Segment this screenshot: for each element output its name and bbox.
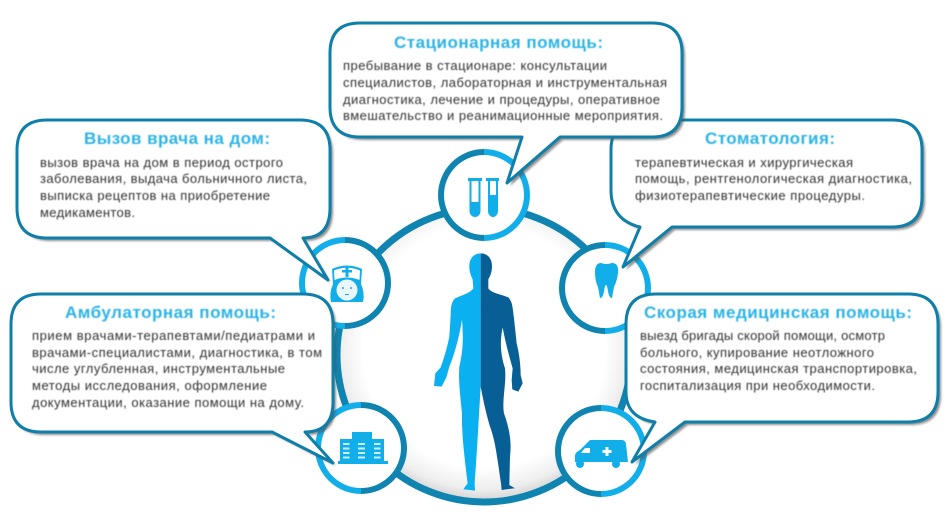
home visit text: медикаментов. bbox=[40, 205, 135, 220]
icon: tooth bbox=[595, 263, 618, 298]
dentistry bubble bbox=[611, 120, 922, 267]
outpatient text: методы исследования, оформление bbox=[32, 378, 267, 393]
circle: tooth bbox=[562, 245, 648, 331]
emergency text bbox=[640, 328, 917, 393]
emergency heading: Скорая медицинская помощь: bbox=[644, 303, 912, 322]
outpatient heading: Амбулаторная помощь: bbox=[65, 303, 276, 322]
human figure bbox=[434, 253, 523, 491]
inpatient bubble bbox=[330, 23, 682, 183]
inpatient text: диагностика, лечение и процедуры, оперативное bbox=[343, 92, 660, 107]
outpatient text bbox=[32, 328, 322, 410]
inpatient text bbox=[343, 58, 667, 123]
icon: nurse bbox=[330, 266, 364, 302]
icon: hospital bbox=[338, 432, 388, 464]
home visit text: вызов врача на дом в период острого bbox=[40, 155, 283, 170]
inpatient text: пребывание в стационаре: консультации bbox=[343, 58, 607, 73]
dentistry text: помощь, рентгенологическая диагностика, bbox=[635, 171, 912, 186]
panel: inpatient care bbox=[330, 23, 685, 186]
dentistry text bbox=[635, 155, 912, 203]
home visit text bbox=[40, 155, 307, 220]
dentistry text: физиотерапевтические процедуры. bbox=[635, 188, 865, 203]
inpatient text: вмешательство и реанимационные мероприятия. bbox=[343, 108, 663, 123]
circle: hospital bbox=[318, 405, 404, 491]
panel: home doctor visit bbox=[17, 120, 333, 283]
emergency text: состояния, медицинская транспортировка, bbox=[640, 361, 917, 376]
dentistry heading: Стоматология: bbox=[705, 129, 835, 148]
outpatient text: прием врачами-терапевтами/педиатрами и bbox=[32, 328, 315, 343]
emergency text: госпитализация при необходимости. bbox=[640, 378, 875, 393]
panel: outpatient care bbox=[11, 294, 336, 466]
emergency bubble bbox=[626, 294, 938, 462]
circle: nurse bbox=[302, 240, 388, 326]
home visit text: заболевания, выдача больничного листа, bbox=[40, 171, 307, 186]
inpatient text: специалистов, лабораторная и инструментальная bbox=[343, 75, 667, 90]
circle: ambulance bbox=[558, 408, 644, 494]
panel: dentistry bbox=[611, 120, 925, 270]
home visit text: выписка рецептов на приобретение bbox=[40, 188, 270, 203]
outpatient bubble bbox=[11, 294, 333, 463]
emergency text: выезд бригады скорой помощи, осмотр bbox=[640, 328, 885, 343]
dentistry text: терапевтическая и хирургическая bbox=[635, 155, 853, 170]
emergency text: больного, купирование неотложного bbox=[640, 345, 874, 360]
home visit heading: Вызов врача на дом: bbox=[84, 129, 270, 148]
outpatient text: числе углубленная, инструментальные bbox=[32, 361, 285, 376]
central sphere bbox=[337, 208, 631, 502]
icon: ambulance bbox=[575, 440, 628, 468]
home visit bubble bbox=[17, 120, 330, 280]
icon: test tubes bbox=[468, 178, 499, 217]
circle: test tubes bbox=[441, 152, 527, 238]
outpatient text: врачами-специалистами, диагностика, в том bbox=[32, 345, 322, 360]
inpatient heading: Стационарная помощь: bbox=[394, 33, 603, 52]
outpatient text: документации, оказание помощи на дому. bbox=[32, 395, 304, 410]
panel: emergency care bbox=[626, 294, 941, 465]
